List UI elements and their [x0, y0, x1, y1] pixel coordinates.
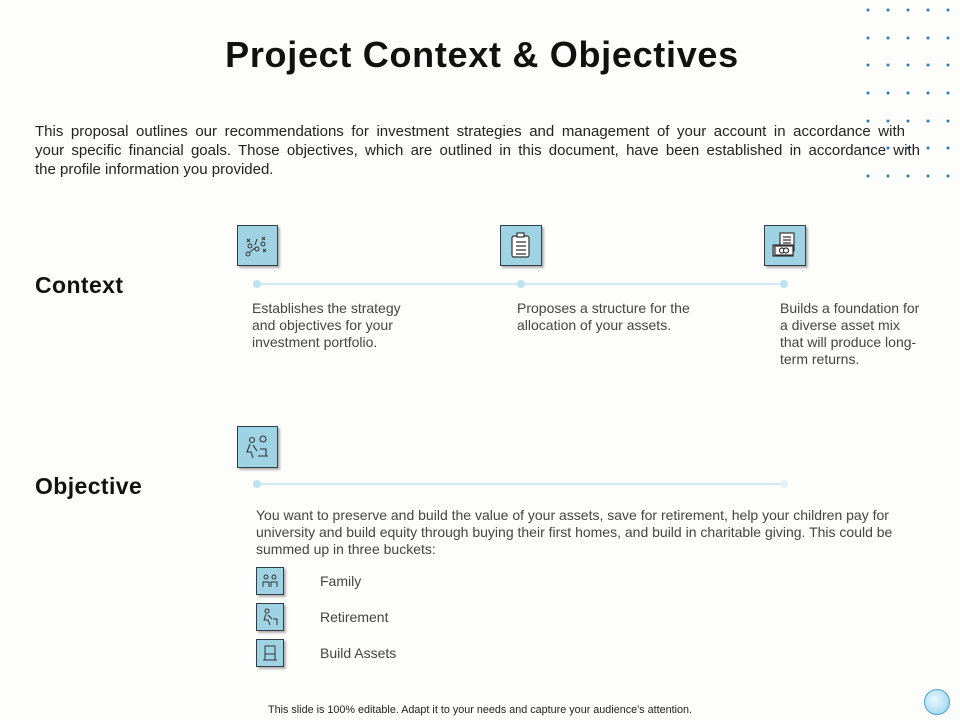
intro text: This proposal outlines our recommendations for investment strategies and management of your account in accordance with: [35, 123, 905, 140]
footer note: This slide is 100% editable. Adapt it to your needs and capture your audience's attention.: [268, 704, 692, 716]
icon: corner circle: [924, 689, 950, 715]
bucket: build assets: Build Assets: [320, 645, 396, 661]
text: context 1: Establishes the strategy: [252, 300, 401, 316]
text: context 1: [252, 300, 401, 350]
intro text: your specific financial goals. Those objectives, which are outlined in this document, have been established in accordance with: [35, 142, 920, 159]
bucket: build assets: [256, 639, 396, 670]
icon: strategy: [237, 225, 278, 266]
text: context 2: allocation of your assets.: [517, 317, 671, 333]
icon: documents and money: [764, 225, 806, 266]
decorative dots grid: [866, 8, 950, 178]
heading: context: Context: [35, 272, 123, 298]
objective timeline: [253, 480, 788, 488]
text: context 3: a diverse asset mix: [780, 317, 900, 333]
text: context 3: Builds a foundation for: [780, 300, 919, 316]
bucket: retirement: Retirement: [320, 609, 388, 625]
text: context 1: and objectives for your: [252, 317, 393, 333]
text: context 3: that will produce long-: [780, 334, 916, 350]
text: context 3: term returns.: [780, 351, 859, 367]
icon: objective: [237, 426, 278, 468]
intro text: [35, 123, 920, 178]
text: objective description: university and build equity through buying their first homes, and build in charitable giving. This could be: [256, 524, 892, 540]
heading: objective: Objective: [35, 473, 142, 499]
text: objective description: [256, 507, 892, 557]
intro text: the profile information you provided.: [35, 161, 273, 178]
text: context 3: [780, 300, 920, 367]
context timeline: [253, 280, 788, 288]
bucket: family: [256, 567, 362, 598]
text: context 1: investment portfolio.: [252, 334, 377, 350]
text: context 2: Proposes a structure for the: [517, 300, 690, 316]
bucket: retirement: [256, 603, 388, 634]
title: Project Context & Objectives: [225, 34, 739, 75]
text: objective description: You want to preserve and build the value of your assets, save for retirement, help your children pay for: [256, 507, 889, 523]
icon: clipboard: [500, 225, 542, 266]
text: context 2: [517, 300, 690, 333]
bucket: family: Family: [320, 573, 361, 589]
text: objective description: summed up in three buckets:: [256, 541, 436, 557]
